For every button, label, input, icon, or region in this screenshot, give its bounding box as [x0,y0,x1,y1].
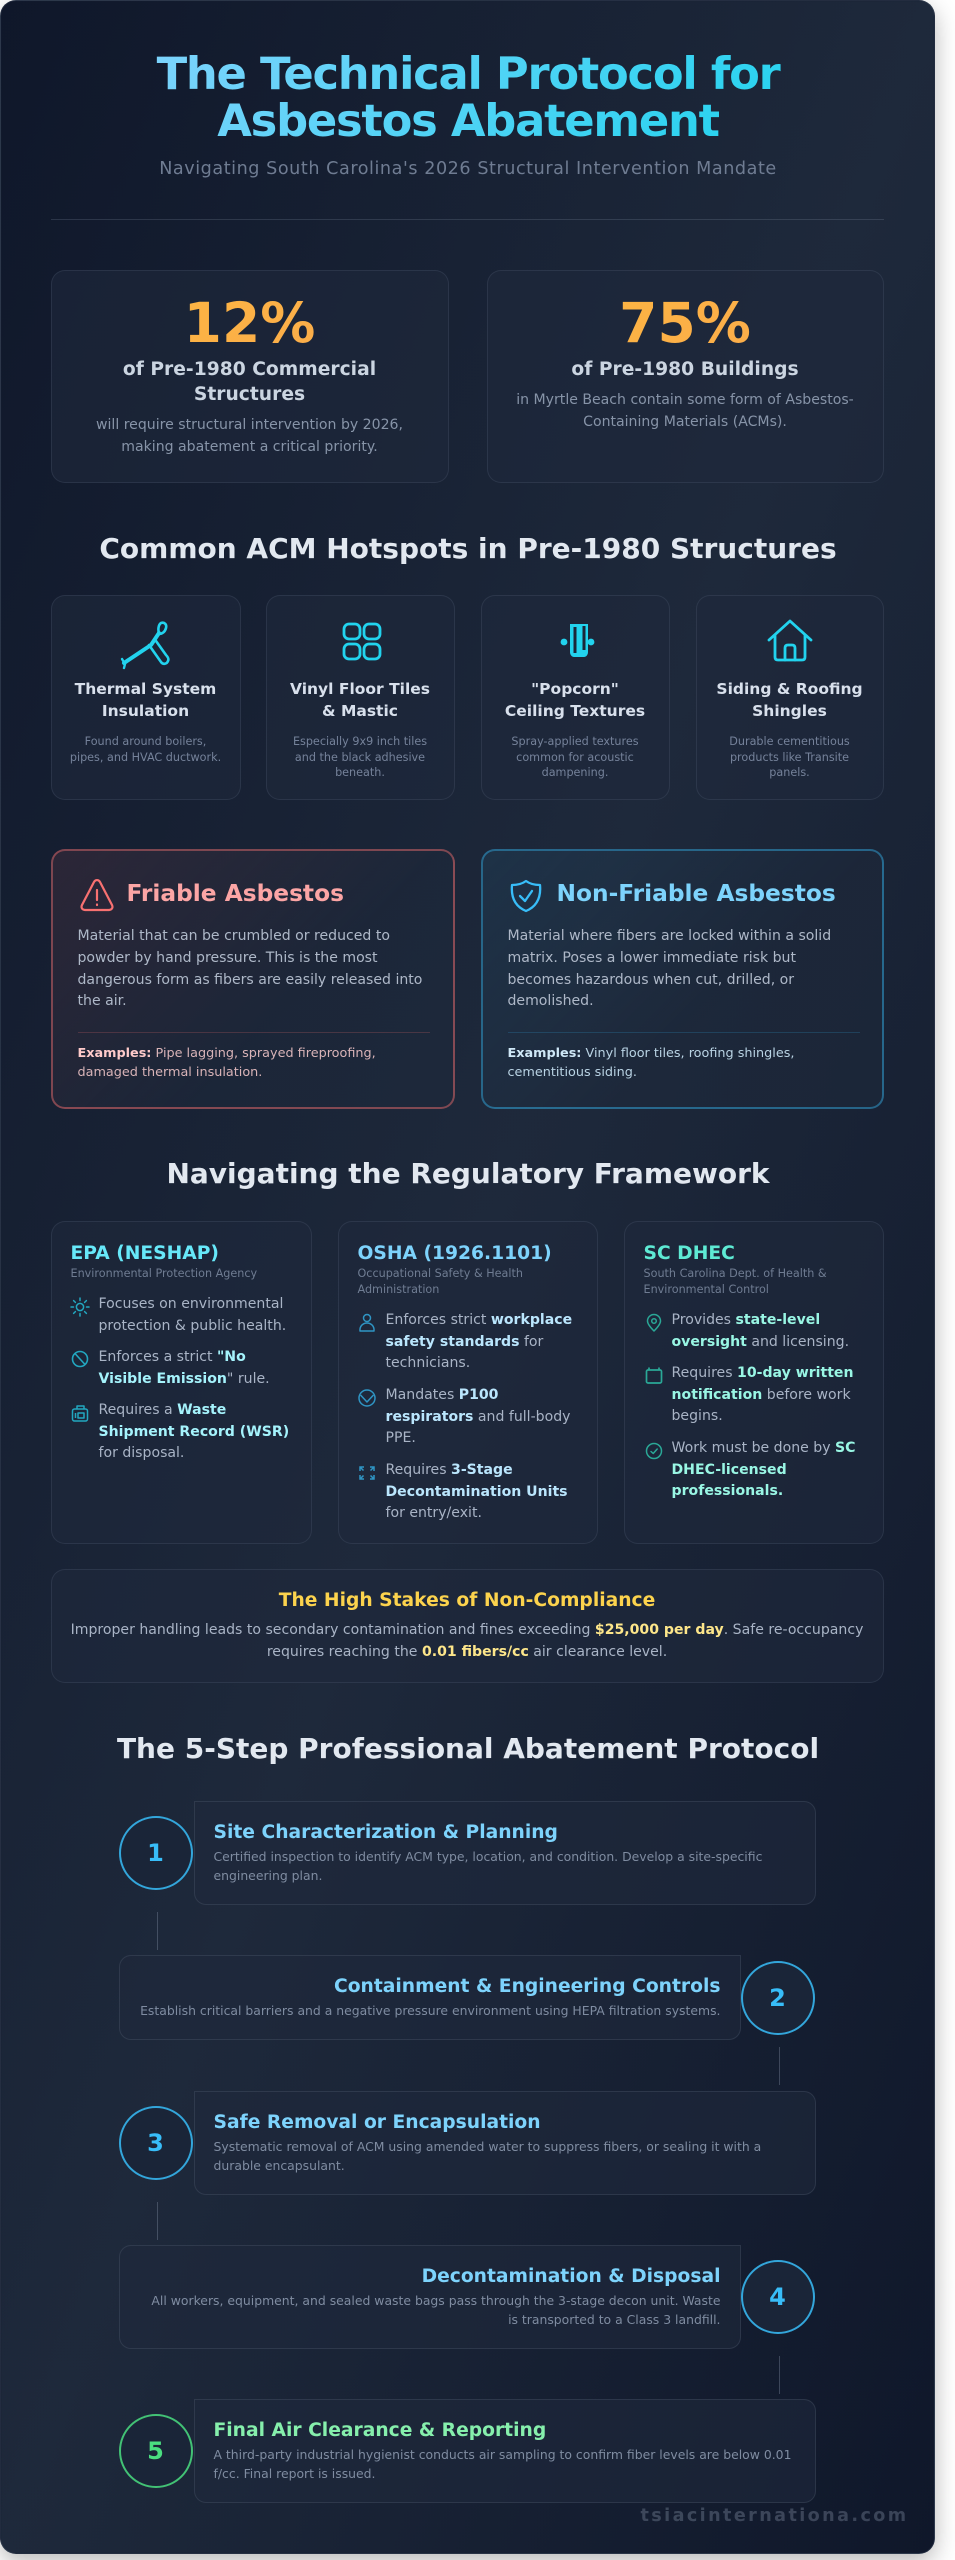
non-friable examples [508,1046,794,1080]
step number 1: 1 [147,1839,164,1867]
card description: Spray-applied textures [511,735,639,748]
step 4 [118,2245,816,2349]
panel: popcorn ceiling [480,595,670,800]
step number 3 [118,2106,192,2180]
icon: ban [72,1350,88,1368]
OSHA item 2 [386,1387,570,1446]
agency name: SC DHEC [644,1243,735,1264]
non-friable body: becomes hazardous when cut, drilled, or [508,972,794,988]
agency name: OSHA (1926.1101) [358,1243,552,1264]
stat description: making abatement a critical priority. [121,439,378,455]
non-friable body: Material where fibers are locked within a solid [508,928,831,944]
OSHA item 1: technicians. [386,1355,470,1371]
OSHA item 1 [386,1312,572,1371]
icon: respirator [358,1389,376,1407]
friable body: the air. [78,993,127,1009]
card description: dampening. [542,766,608,779]
step 1 [118,1801,816,1905]
non-friable heading: Non-Friable Asbestos [556,880,836,907]
card title: Shingles [752,702,827,720]
SC item 1: oversight and licensing. [672,1334,849,1350]
step 5 description: f/cc. Final report is issued. [214,2466,376,2481]
callout heading: The High Stakes of Non-Compliance [279,1590,655,1611]
stat description: Containing Materials (ACMs). [583,414,787,430]
OSHA item 3: Requires 3-Stage [386,1462,513,1478]
card title: Thermal System [75,680,216,698]
step 5 [118,2399,816,2503]
step number 5: 5 [147,2437,164,2465]
card title [74,680,216,720]
subtitle: Navigating South Carolina's 2026 Structural Intervention Mandate [159,159,777,179]
SC item 1 [672,1312,849,1350]
SC item 2: notification before work [672,1387,851,1403]
panel: non-friable asbestos [480,849,884,1109]
step number 1 [118,1816,192,1890]
icon: expand corners [359,1466,375,1480]
step 5 description [214,2446,791,2483]
non-friable body: demolished. [508,993,594,1009]
card title: & Mastic [322,702,398,720]
stat label: of Pre-1980 Buildings [571,359,799,380]
icon: document bag [72,1405,88,1422]
panel: SC DHEC [624,1221,884,1544]
heading: regulatory: Navigating the Regulatory Framework [166,1157,770,1190]
title: The Technical Protocol for [157,47,779,100]
step 1 description: engineering plan. [214,1868,322,1883]
stat number: 12% [184,291,315,355]
OSHA item 3: Decontamination Units [386,1484,568,1500]
card title: Ceiling Textures [505,702,645,720]
step 2 box [118,1955,740,2040]
EPA item 2 [98,1349,270,1387]
step 4 title: Decontamination & Disposal [422,2266,720,2287]
friable body: powder by hand pressure. This is the most [78,950,378,966]
step 2 [118,1955,816,2040]
step 1 description [214,1848,762,1885]
stat number [488,293,882,353]
panel: friable asbestos [50,849,454,1109]
friable heading: Friable Asbestos [126,880,344,907]
step 3 [118,2091,816,2195]
stat label: Structures [194,384,305,405]
stat label: of Pre-1980 Commercial [123,359,376,380]
icon: person [359,1314,375,1332]
friable examples: Examples: Pipe lagging, sprayed fireproofing, [78,1046,376,1061]
icon: location pin [646,1314,662,1332]
card description: Found around boilers, [85,735,206,748]
step 4 description: All workers, equipment, and sealed waste bags pass through the 3-stage decon unit. Waste [151,2293,720,2308]
step number 2 [740,1961,814,2035]
panel: stat 12% [50,270,448,483]
agency full name: South Carolina Dept. of Health & [644,1267,827,1280]
card description [293,735,427,779]
stat number [52,293,448,353]
agency full name: Environmental Protection Agency [70,1267,257,1280]
OSHA item 1: safety standards for [386,1334,543,1350]
agency full name [358,1267,523,1296]
step 1 description: Certified inspection to identify ACM type, location, and condition. Develop a site-specific [214,1849,762,1864]
EPA item 1: protection & public health. [98,1318,286,1334]
card description: Durable cementitious [729,735,850,748]
SC item 2 [672,1365,854,1424]
callout text: requires reaching the 0.01 fibers/cc air clearance level. [267,1644,667,1660]
step number 3: 3 [147,2129,164,2157]
card description: beneath. [335,766,385,779]
step number 4 [740,2260,814,2334]
card title: Vinyl Floor Tiles [290,680,430,698]
non-friable body: matrix. Poses a lower immediate risk but [508,950,796,966]
friable body [78,928,422,1009]
step 3 description: Systematic removal of ACM using amended water to suppress fibers, or sealing it with a [214,2139,761,2154]
EPA item 3: Shipment Record (WSR) [98,1424,289,1440]
non-friable body [508,928,831,1009]
icon: warning triangle [80,879,114,912]
icon: pipe [120,621,170,670]
friable body: dangerous form as fibers are easily released into [78,972,422,988]
agency name: EPA (NESHAP) [70,1243,219,1264]
step 2 title: Containment & Engineering Controls [334,1976,720,1997]
card description: Especially 9x9 inch tiles [293,735,427,748]
EPA item 2: Enforces a strict "No [98,1349,246,1365]
agency full name: Environmental Control [644,1283,769,1296]
card title [290,680,430,720]
card title: "Popcorn" [531,680,619,698]
non-friable examples: cementitious siding. [508,1065,637,1080]
EPA item 1 [98,1296,286,1334]
icon: shield check [510,880,542,912]
stat number: 75% [619,291,751,355]
panel: stat 75% [486,270,884,483]
card description [729,735,850,779]
step number 2: 2 [769,1984,786,2012]
icon: ceiling texture [560,624,594,657]
callout text: Improper handling leads to secondary contamination and fines exceeding $25,000 per day. Safe re-occupancy [71,1622,863,1638]
callout text [52,1620,882,1663]
stat description [516,392,854,430]
card description [70,735,221,764]
SC item 3: DHEC-licensed [672,1462,787,1478]
card description: products like Transite [730,751,849,764]
step 3 title: Safe Removal or Encapsulation [214,2112,541,2133]
SC item 1: Provides state-level [672,1312,820,1328]
agency full name: Administration [358,1283,439,1296]
icon: check circle [646,1442,662,1460]
SC item 3: professionals. [672,1483,783,1499]
panel: vinyl tiles [266,595,454,800]
panel: EPA [50,1221,312,1544]
title: Asbestos Abatement [217,94,719,147]
step 1 title: Site Characterization & Planning [214,1822,558,1843]
panel: OSHA [338,1221,598,1544]
step number 5 [118,2414,192,2488]
icon: calendar [646,1368,662,1384]
EPA item 3: Requires a Waste [98,1402,226,1418]
step number 4: 4 [769,2283,786,2311]
EPA item 3 [98,1402,289,1461]
SC item 3: Work must be done by SC [672,1440,856,1456]
EPA item 2: Visible Emission" rule. [98,1371,270,1387]
SC item 2: Requires 10-day written [672,1365,854,1381]
card title [505,680,645,720]
step 3 description: durable encapsulant. [214,2158,345,2173]
EPA item 3: for disposal. [98,1445,184,1461]
OSHA item 2: PPE. [386,1430,416,1446]
friable examples [78,1046,376,1080]
step 5 description: A third-party industrial hygienist conducts air sampling to confirm fiber levels are below 0.01 [214,2447,791,2462]
icon: sun [70,1297,90,1317]
friable examples: damaged thermal insulation. [78,1065,262,1080]
step 3 description [214,2138,761,2175]
OSHA item 1: Enforces strict workplace [386,1312,572,1328]
SC item 2: begins. [672,1408,723,1424]
step 2 description: Establish critical barriers and a negative pressure environment using HEPA filtration systems. [140,2003,720,2018]
OSHA item 2: respirators and full-body [386,1409,570,1425]
SC item 3 [672,1438,856,1503]
stat description [96,417,403,455]
OSHA item 3: for entry/exit. [386,1505,482,1521]
step 4 description: is transported to a Class 3 landfill. [508,2312,720,2327]
OSHA item 3 [386,1462,568,1521]
icon: house [768,620,812,662]
agency full name: Occupational Safety & Health [358,1267,523,1280]
heading: protocol: The 5-Step Professional Abatement Protocol [117,1732,819,1765]
icon: tiles [342,622,382,660]
OSHA item 2: Mandates P100 [386,1387,498,1403]
card description: common for acoustic [516,751,634,764]
heading: hotspots: Common ACM Hotspots in Pre-1980 Structures [99,532,837,565]
EPA item 1: Focuses on environmental [98,1296,283,1312]
panel: thermal insulation [50,595,240,800]
title [150,50,786,144]
step 5 box [194,2399,816,2503]
card description: and the black adhesive [295,751,425,764]
step 1 box [194,1801,816,1905]
watermark: tsiacinternationa.com [640,2506,908,2526]
card title: Insulation [102,702,189,720]
panel: siding and roofing [696,595,884,800]
step 4 box [118,2245,740,2349]
step 5 title: Final Air Clearance & Reporting [214,2420,546,2441]
card title [716,680,863,720]
non-friable examples: Examples: Vinyl floor tiles, roofing shingles, [508,1046,794,1061]
stat label [123,359,376,405]
friable body: Material that can be crumbled or reduced to [78,928,390,944]
card title: Siding & Roofing [716,680,863,698]
step 4 description [151,2292,720,2329]
card description: pipes, and HVAC ductwork. [70,751,221,764]
card description [511,735,639,779]
agency full name [644,1267,827,1296]
card description: panels. [769,766,810,779]
stat description: in Myrtle Beach contain some form of Asbestos- [516,392,854,408]
step 3 box [194,2091,816,2195]
stat description: will require structural intervention by 2026, [96,417,403,433]
callout: non-compliance [50,1569,884,1683]
